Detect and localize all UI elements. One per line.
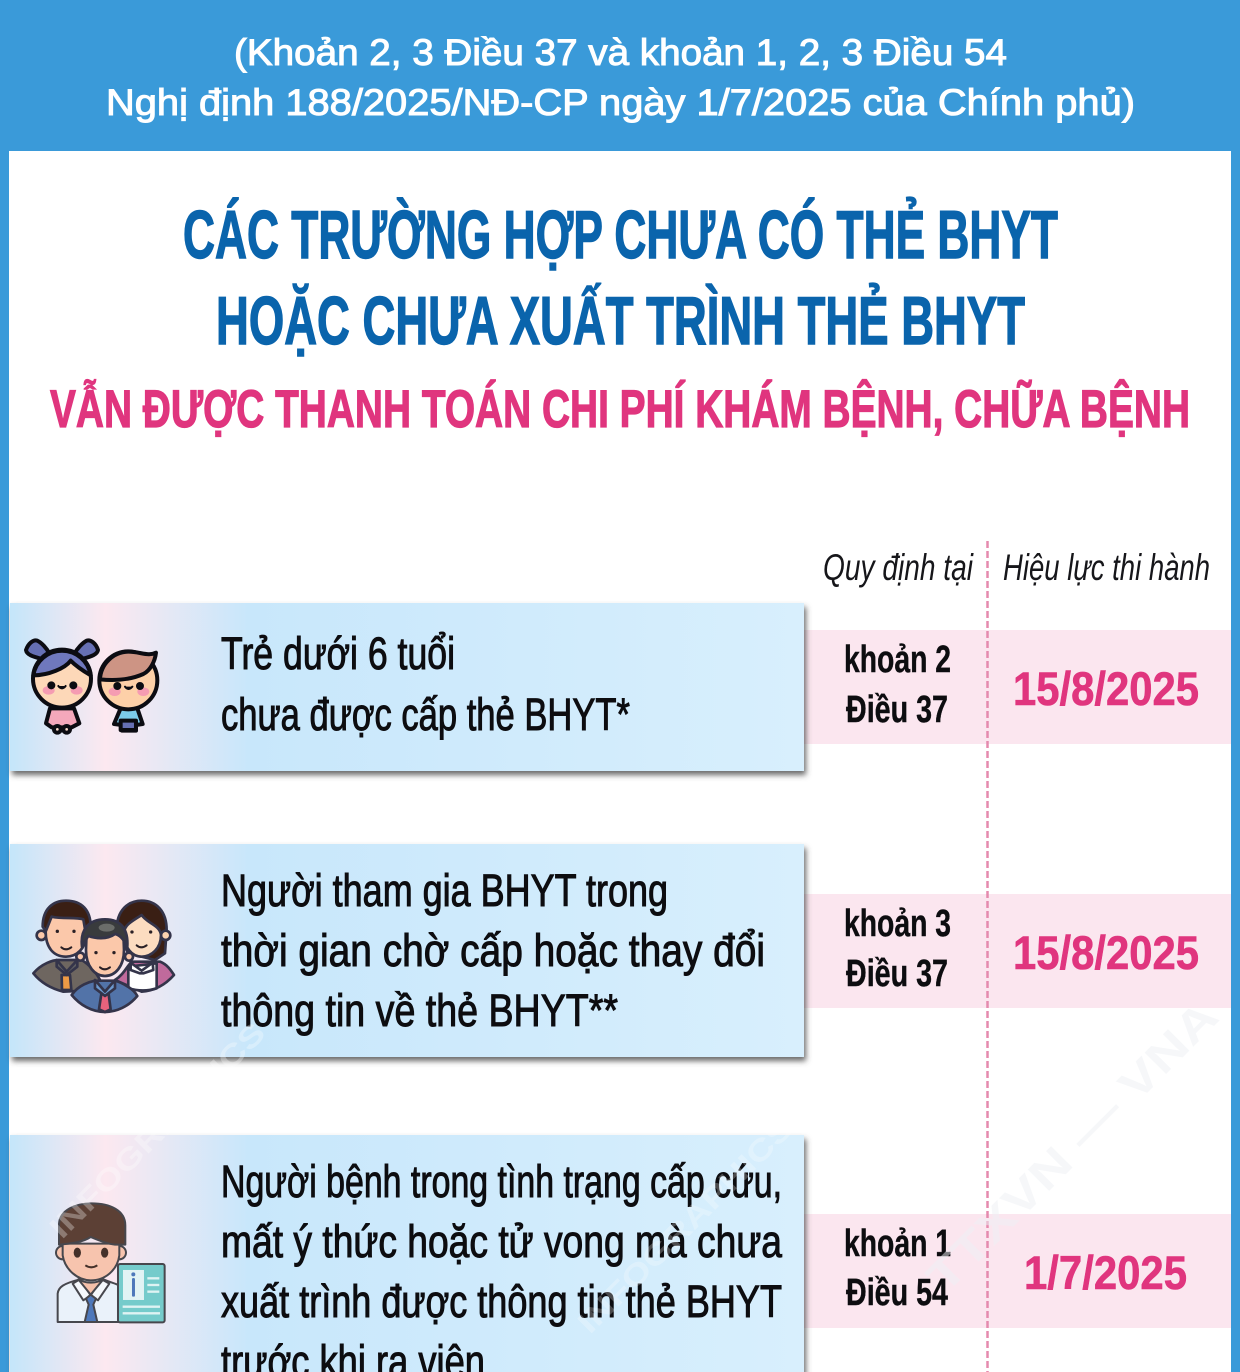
- row 3 text: [221, 1156, 783, 1372]
- header: legal source: [106, 32, 1135, 123]
- row 2 text: Người tham gia BHYT trong: [221, 865, 668, 916]
- watermark: [44, 992, 1228, 1340]
- row 2 text: thời gian chờ cấp hoặc thay đổi: [221, 925, 765, 976]
- row 3 text: Người bệnh trong tình trạng cấp cứu,: [221, 1156, 782, 1207]
- icon: man with information card: [56, 1203, 165, 1322]
- row 3 legal reference: Điều 54: [846, 1272, 948, 1314]
- row 1 legal reference: [844, 639, 951, 731]
- panel: row 3 card: [10, 1135, 804, 1372]
- row 1 legal reference: khoản 2: [844, 639, 951, 681]
- row 2 legal reference: [844, 903, 951, 995]
- row 2 pink strip: [804, 894, 1231, 1008]
- header: legal source: Nghị định 188/2025/NĐ-CP ngày 1/7/2025 của Chính phủ): [106, 82, 1135, 123]
- row 3 legal reference: [844, 1223, 951, 1314]
- header: legal source: (Khoản 2, 3 Điều 37 và khoản 1, 2, 3 Điều 54: [234, 32, 1007, 73]
- row 2 text: thông tin về thẻ BHYT**: [221, 985, 618, 1036]
- watermark: INFOGRAPHICS: [572, 1112, 800, 1340]
- row 3 pink strip: [804, 1214, 1231, 1328]
- panel: row 2 card: [10, 844, 804, 1057]
- watermark: TTXVN — VNA: [917, 992, 1228, 1302]
- row 2 legal reference: khoản 3: [844, 903, 951, 945]
- row 2 effective date: 15/8/2025: [1013, 926, 1199, 979]
- row 1 effective date: 15/8/2025: [1013, 662, 1199, 715]
- panel: row 1 card: [10, 603, 804, 771]
- row 1 text: Trẻ dưới 6 tuổi: [221, 628, 455, 679]
- row 1 pink strip: [804, 630, 1231, 744]
- row 3 text: mất ý thức hoặc tử vong mà chưa: [221, 1216, 783, 1267]
- row 3 text: xuất trình được thông tin thẻ BHYT: [221, 1276, 782, 1327]
- row 3 effective date: 1/7/2025: [1024, 1246, 1187, 1299]
- row 1 text: [221, 628, 630, 740]
- row 1 legal reference: Điều 37: [846, 689, 948, 731]
- icon: three people: [33, 901, 174, 1012]
- title: [183, 196, 1058, 359]
- row 1 text: chưa được cấp thẻ BHYT*: [221, 689, 630, 740]
- watermark: INFOGRAPHICS: [44, 1017, 272, 1245]
- icon: two children: [26, 640, 157, 733]
- row 2 text: [221, 865, 765, 1036]
- row 2 legal reference: Điều 37: [846, 953, 948, 995]
- column heading: Quy định tại: Quy định tại: [823, 547, 974, 588]
- row 3 legal reference: khoản 1: [844, 1223, 951, 1265]
